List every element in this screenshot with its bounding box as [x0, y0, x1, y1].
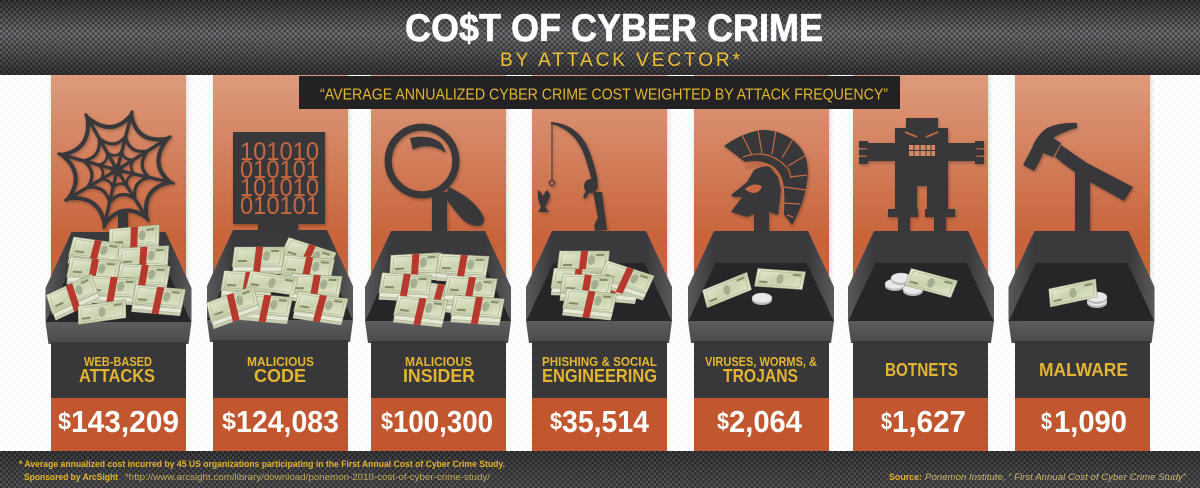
icon: hammer	[1023, 123, 1133, 233]
label: CODE	[254, 365, 306, 386]
value: $	[550, 408, 563, 435]
column: malicious code	[203, 75, 353, 451]
label: BOTNETS	[885, 359, 958, 380]
source: Ponemon Institute, “ First Annual Cost of Cyber Crime Study”	[925, 472, 1187, 482]
bin with coins and cash	[848, 231, 994, 343]
bin with cash	[43, 225, 191, 344]
header band	[0, 0, 1200, 75]
icon: trojan helmet	[724, 130, 808, 233]
icon: magnifying glass	[388, 127, 484, 233]
footer band	[0, 451, 1200, 488]
value: 2,064	[729, 404, 803, 439]
column: botnets	[848, 75, 994, 451]
column: viruses, worms and trojans	[688, 75, 834, 451]
label: TROJANS	[723, 365, 798, 386]
icon: binary panel	[233, 132, 325, 232]
url: *http://www.arcsight.com/library/download/ponemon-2010-cost-of-cyber-crime-study/	[125, 472, 491, 482]
icon: binary panel: 101010	[240, 138, 319, 166]
label	[853, 341, 988, 398]
value	[694, 398, 829, 451]
label: ENGINEERING	[542, 365, 657, 386]
value	[532, 398, 667, 451]
column: phishing and social engineering	[526, 75, 672, 451]
icon: binary panel: 101010	[240, 174, 319, 202]
label	[51, 342, 186, 398]
column: malicious insider	[365, 75, 511, 451]
column: web-based attacks	[43, 75, 191, 451]
title: CO$T OF CYBER CRIME	[405, 7, 823, 50]
label: MALICIOUS	[247, 355, 314, 369]
bin with cash	[203, 230, 353, 342]
value: 1,090	[1054, 404, 1127, 439]
value: 1,627	[892, 404, 966, 439]
label	[371, 341, 506, 398]
bin with cash and coin	[688, 231, 834, 343]
value	[1015, 398, 1150, 451]
value: $	[717, 408, 730, 435]
footnote: * Average annualized cost incurred by 45 US organizations participating in the First Annual Cost of Cyber Crime Study.	[19, 459, 505, 469]
value: 100,300	[393, 404, 493, 439]
label	[213, 340, 348, 398]
icon: binary panel: 010101	[240, 192, 319, 220]
bin with cash and coins	[1008, 231, 1154, 343]
label: VIRUSES, WORMS, &	[705, 355, 817, 369]
value: 35,514	[562, 404, 650, 439]
sponsor: Sponsored by ArcSight	[24, 472, 118, 482]
banner quote: “AVERAGE ANNUALIZED CYBER CRIME COST WEIGHTED BY ATTACK FREQUENCY”	[320, 86, 888, 104]
value	[51, 398, 186, 451]
icon: fishing rod	[538, 122, 607, 231]
label	[694, 341, 829, 398]
value: $	[222, 408, 237, 435]
value	[213, 398, 348, 451]
label: PHISHING & SOCIAL	[542, 355, 657, 369]
bin with cash	[365, 231, 511, 343]
icon: robot	[859, 118, 984, 232]
label: ATTACKS	[79, 365, 155, 386]
banner quote	[299, 76, 900, 109]
label	[1015, 341, 1150, 398]
label: MALICIOUS	[405, 355, 472, 369]
value: $	[381, 408, 394, 435]
bin with cash	[526, 231, 672, 343]
label: WEB-BASED	[84, 355, 152, 369]
value: $	[58, 408, 72, 435]
value	[371, 398, 506, 451]
value: $	[881, 408, 893, 435]
value: 124,083	[236, 404, 339, 439]
value: $	[1041, 408, 1053, 435]
subtitle: BY ATTACK VECTOR*	[500, 50, 741, 71]
value: 143,209	[71, 404, 179, 439]
label: INSIDER	[403, 365, 475, 386]
icon: binary panel: 010101	[240, 156, 319, 184]
column: malware	[1008, 75, 1154, 451]
source: Source:	[889, 472, 922, 482]
icon: spider web	[59, 112, 173, 234]
label: MALWARE	[1039, 359, 1128, 380]
value	[853, 398, 988, 451]
label	[532, 341, 667, 398]
